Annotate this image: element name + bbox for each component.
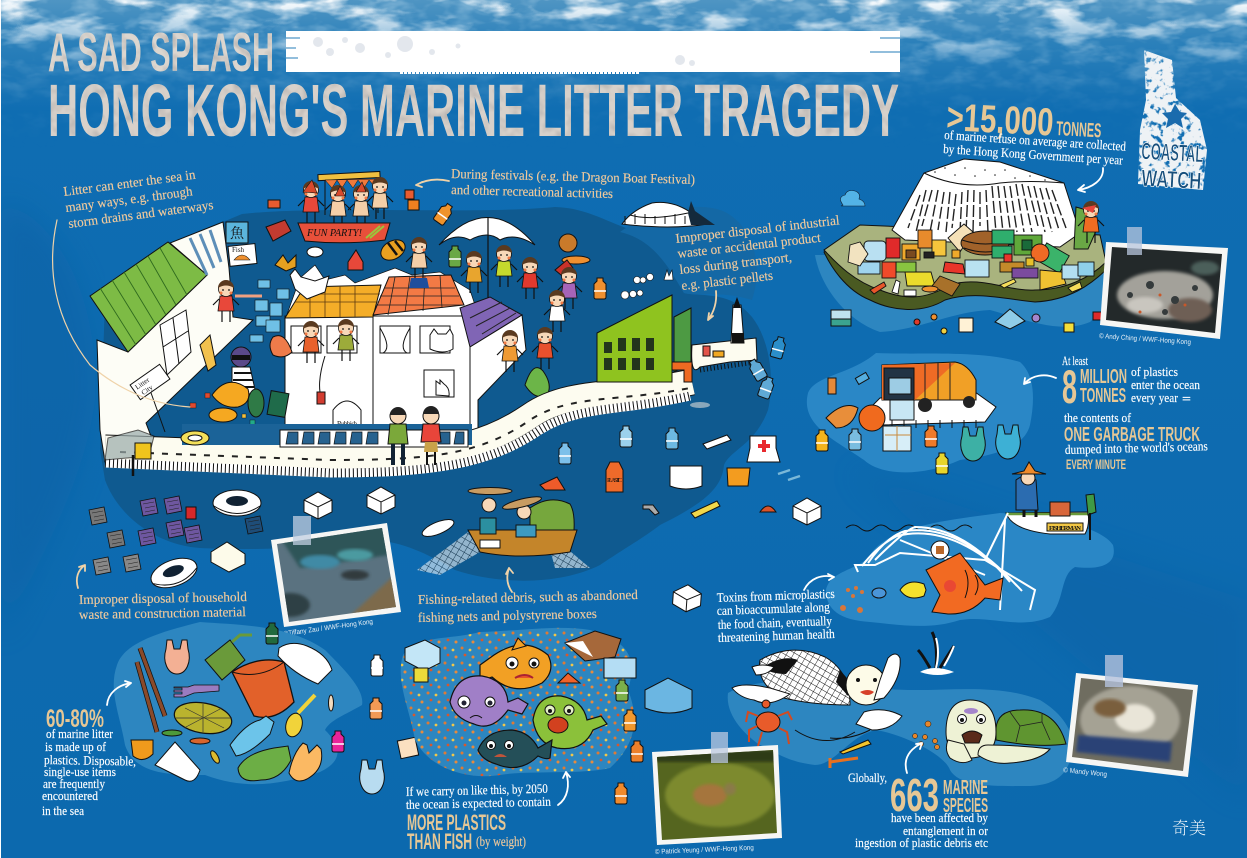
illustration: Litter City sign <box>130 364 170 432</box>
panel: 8 million tonnes statistic: At least <box>1062 353 1088 368</box>
small floating litter between panels <box>360 655 419 794</box>
panel: refuse statistic <box>943 96 1127 168</box>
illustration: left building with green roof <box>90 222 253 462</box>
text: household waste: Improper disposal of household <box>79 589 247 607</box>
panel: 8 million tonnes statistic: the contents of <box>1064 410 1132 425</box>
arrow: 60-80% <box>107 681 131 705</box>
panel: 8 million tonnes statistic: 8 <box>1062 360 1077 413</box>
text: toxins: can bioaccumulate along <box>717 599 830 618</box>
panel: 60-80% statistic <box>42 705 136 818</box>
illustration: fishing bycatch scene: FISHERMAN <box>1049 525 1081 532</box>
panel: 60-80% statistic: in the sea <box>42 803 84 818</box>
text: toxins: the food chain, eventually <box>718 613 832 632</box>
arrow: 663 species <box>906 743 922 773</box>
illustration: small offshore island <box>622 201 715 227</box>
illustration: person throwing boxes from balcony <box>213 280 289 342</box>
text: toxins <box>717 586 835 645</box>
illustration: fishing bycatch scene <box>672 462 1114 626</box>
illustration: shop signs <box>226 222 257 266</box>
logo: Coastal Watch: WATCH <box>1141 165 1202 195</box>
panel: turtles and crab <box>728 650 1072 786</box>
dark water around the town <box>100 207 771 581</box>
arrow: household <box>77 565 85 588</box>
panel: more plastics than fish: the ocean is expected to contain <box>406 794 551 812</box>
illustration: masked litterer and dumped bags <box>190 347 289 429</box>
panel: refuse statistic: >15,000 <box>946 96 1055 145</box>
illustration: right wing balcony people <box>497 290 570 397</box>
panel: 8 million tonnes statistic: MILLION <box>1080 366 1127 388</box>
arrow: truck <box>1024 375 1056 384</box>
text: toxins: Toxins from microplastics <box>717 586 835 605</box>
illustration: roof person and umbrella crowd <box>377 217 606 309</box>
photo: turtle on seabed <box>650 732 782 845</box>
text: industrial disposal: loss during transport, <box>679 249 793 277</box>
panel: 663 marine species statistic: MARINE <box>943 777 988 799</box>
floating litter below garbage island <box>831 309 1103 334</box>
panel: 60-80% statistic: are frequently <box>43 776 105 791</box>
signature: 奇美 <box>1172 814 1206 839</box>
arrow: fishing debris <box>506 568 513 592</box>
panel: 8 million tonnes statistic: EVERY MINUTE <box>1066 456 1126 472</box>
illustration: shop signs: 魚 <box>230 226 245 242</box>
text: festivals: and other recreational activities <box>451 182 613 201</box>
floating debris: polystyrene boxes <box>211 487 395 572</box>
text: industrial disposal: e.g. plastic pellets <box>681 268 774 293</box>
illustration: Litter City sign: Litter <box>134 376 152 391</box>
arrow: refuse <box>1078 168 1103 192</box>
panel: 60-80% statistic: plastics. Disposable, <box>44 752 136 769</box>
panel: 663 marine species statistic <box>848 769 989 850</box>
text: festivals <box>451 166 695 201</box>
arrow: festivals <box>416 180 449 187</box>
illustration: garbage truck <box>807 353 1033 474</box>
panel: 60-80% statistic: is made up of <box>45 739 107 754</box>
arrow: industrial disposal <box>708 291 716 320</box>
panel: 60-80% statistic: single-use items <box>44 764 116 779</box>
illustration: Litter City sign: City <box>140 383 155 397</box>
panel: 8 million tonnes statistic: = <box>1182 391 1191 406</box>
title banner: white brush stroke <box>286 31 900 72</box>
arrow: litter circle <box>53 220 190 407</box>
floating debris: central sea: PLASTIC <box>607 477 622 484</box>
illustration: polystyrene block on sea <box>645 678 692 713</box>
floating items near festival boat <box>266 190 590 280</box>
text: fishing debris: fishing nets and polystyrene boxes <box>418 606 597 625</box>
illustration: shop signs: Fish <box>232 246 245 254</box>
panel: more plastics than fish: MORE PLASTICS <box>407 810 506 835</box>
illustration: festival boat <box>298 171 393 243</box>
illustration: two men on the road <box>388 406 441 465</box>
logo: Coastal Watch <box>1138 50 1207 195</box>
photo: refuse in a stream <box>1100 227 1230 340</box>
panel: 8 million tonnes statistic: TONNES <box>1080 385 1126 407</box>
caption: Tiffany Zau: ©Tiffany Zau / WWF-Hong Kong <box>283 618 373 638</box>
panel: refuse statistic: by the Hong Kong Government per year <box>943 141 1124 168</box>
panel: 60-80% statistic: 60-80% <box>46 705 104 733</box>
text: festivals: During festivals (e.g. the Dragon Boat Festival) <box>451 166 695 187</box>
text: industrial disposal: Improper disposal of industrial <box>675 212 841 246</box>
floating debris: purple and grey tiles <box>89 496 263 575</box>
panel: plastics and fish <box>401 628 636 776</box>
small litter bottles right of fish <box>615 710 643 804</box>
text: industrial disposal <box>675 212 841 293</box>
panel: 60-80% statistic: encountered <box>42 788 98 803</box>
panel: 663 marine species statistic: 663 <box>890 769 939 821</box>
illustration: green factory <box>597 295 692 382</box>
white wave behind the roofs <box>285 265 480 320</box>
text: litter entry ways <box>62 167 214 231</box>
panel: 8 million tonnes statistic: of plastics <box>1131 364 1178 379</box>
caption: Patrick Yeung: © Patrick Yeung / WWF-Hong Kong <box>655 844 754 856</box>
panel: 60-80% statistic: of marine litter <box>46 726 114 741</box>
panel: 8 million tonnes statistic <box>1062 353 1208 472</box>
panel: 8 million tonnes statistic: dumped into the world's oceans <box>1065 438 1208 457</box>
illustration: central white houses <box>270 275 526 431</box>
panel: 8 million tonnes statistic: enter the ocean <box>1131 377 1200 392</box>
text: fishing debris: Fishing-related debris, such as abandoned <box>418 587 638 607</box>
arrow: toxins <box>804 574 834 590</box>
text: toxins: threatening human health <box>718 626 835 645</box>
panel: 663 marine species statistic: have been affected by <box>891 810 988 825</box>
panel: 663 marine species statistic: ingestion of plastic debris etc <box>855 835 988 850</box>
illustration: rubbish bin <box>333 401 361 430</box>
panel: more plastics than fish: THAN FISH <box>407 829 472 854</box>
floating debris: central sea <box>540 426 821 525</box>
text: litter entry ways: many ways, e.g. through <box>64 183 194 215</box>
floating debris: tyres <box>147 490 261 593</box>
panel: refuse statistic: of marine refuse on average are collected <box>944 127 1127 154</box>
text: fishing debris <box>418 587 638 625</box>
text: household waste <box>79 589 247 622</box>
illustration: cat on the wave <box>290 269 329 299</box>
panel: more plastics than fish: (by weight) <box>476 834 526 849</box>
caption: Mandy Wong: © Mandy Wong <box>1063 766 1107 779</box>
panel: 8 million tonnes statistic: every year <box>1131 390 1179 405</box>
panel: 663 marine species statistic: Globally, <box>848 770 887 785</box>
panel: more plastics than fish <box>406 781 551 854</box>
illustration: garbage island <box>815 159 1112 332</box>
illustration: seaweed rock <box>918 632 954 675</box>
illustration: lighthouse and pier <box>690 297 757 408</box>
panel: household plastic items <box>114 622 362 784</box>
arrow: more plastics <box>558 772 570 805</box>
text: litter entry ways: storm drains and waterways <box>67 197 214 231</box>
illustration: fishermen and boat with nets <box>417 488 590 575</box>
pellets and small fragments near factory <box>621 270 673 299</box>
panel: refuse statistic: TONNES <box>1056 118 1102 142</box>
text: industrial disposal: waste or accidental product <box>677 230 822 261</box>
panel: 663 marine species statistic: entanglement in or <box>903 823 989 838</box>
caption: Andy Ching: © Andy Ching / WWF-Hong Kong <box>1099 332 1191 346</box>
photo: polluted harbour <box>270 516 401 630</box>
panel: more plastics than fish: If we carry on like this, by 2050 <box>406 781 548 799</box>
photo: debris from animal <box>1065 655 1200 780</box>
illustration: road and sea wall <box>105 382 692 476</box>
floating bottles beside pier <box>747 336 787 400</box>
illustration: rubbish bin: Rubbish <box>337 420 358 428</box>
title <box>48 21 899 152</box>
text: litter entry ways: Litter can enter the sea in <box>62 167 196 199</box>
text: household waste: waste and construction material <box>79 604 246 622</box>
panel: 663 marine species statistic: SPECIES <box>943 795 988 817</box>
illustration: festival boat: FUN PARTY! <box>306 228 362 239</box>
title: A SAD SPLASH <box>48 21 274 83</box>
